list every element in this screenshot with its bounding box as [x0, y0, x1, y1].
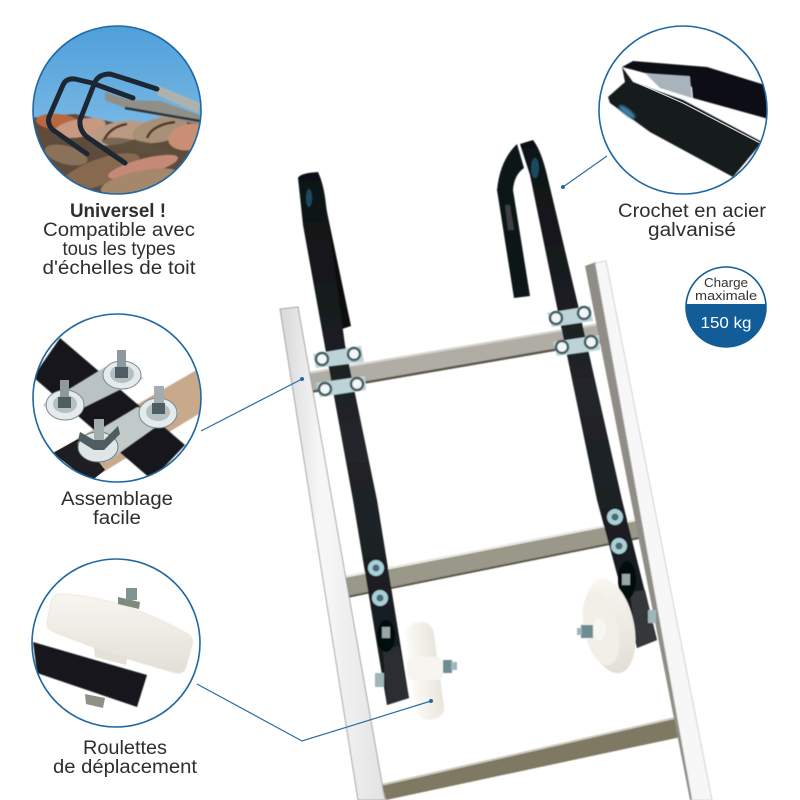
- strap washers: [368, 509, 627, 606]
- text: wheels: de déplacement: [53, 757, 198, 778]
- text: hook: [618, 201, 767, 241]
- photo rung section: [54, 438, 105, 478]
- badge: maximum load: [685, 267, 767, 350]
- text: hook: Crochet en acier: [618, 201, 767, 222]
- photo background: [595, 20, 773, 198]
- badge value: 150 kg: [700, 315, 752, 332]
- photo metal rails: [105, 85, 200, 125]
- text: assembly: facile: [93, 508, 141, 529]
- wet highlight on left hook: [306, 189, 312, 207]
- photo sky: [34, 26, 200, 124]
- callout line: hook: [561, 156, 607, 189]
- panel: universal hook on tiled roof: [32, 25, 202, 195]
- photo inner reflection: [645, 73, 692, 98]
- photo zinc plates: [43, 367, 180, 462]
- ladder rung 2: [345, 518, 644, 598]
- panel: wheel close-up: [30, 555, 205, 730]
- photo hook pipes: [48, 74, 157, 163]
- left strap: [298, 172, 409, 705]
- circle outline: [33, 26, 201, 194]
- photo back of hook: [622, 61, 772, 120]
- right strap: [520, 140, 657, 648]
- badge text top: [695, 275, 757, 303]
- right rail white face: [595, 261, 712, 800]
- right rail grey side: [585, 262, 712, 800]
- ladder rung 1: [308, 322, 606, 393]
- photo front of hook: [608, 67, 762, 177]
- left strap flange: [316, 198, 351, 329]
- wet highlight on hooks: [531, 158, 539, 178]
- text: hook: galvanisé: [648, 220, 736, 241]
- photo hub: [94, 648, 127, 665]
- text: universal: Universel !: [70, 201, 166, 222]
- photo upper bolt: [118, 588, 140, 609]
- right outer nut: [648, 610, 656, 623]
- panel: galvanised hook close-up: [595, 20, 773, 198]
- photo black strap: [33, 338, 185, 480]
- photo roof tiles: [34, 113, 200, 194]
- panel: easy assembly close-up: [30, 310, 205, 485]
- badge lower fill: [686, 304, 766, 346]
- text: wheels: Roulettes: [83, 738, 167, 759]
- ladder rung 3: [382, 716, 681, 800]
- badge text top: maximale: [695, 288, 757, 303]
- photo lower nut: [85, 694, 105, 708]
- photo bolts: [46, 350, 177, 462]
- photo metal edge: [635, 82, 760, 143]
- text: universal: d'échelles de toit: [42, 258, 196, 279]
- text: wheels: [53, 738, 198, 778]
- text: assembly: [61, 489, 173, 529]
- photo wheel: [47, 594, 193, 673]
- circle outline: [32, 559, 200, 727]
- right assembly plates: [547, 306, 600, 356]
- circle outline: [33, 314, 201, 482]
- badge text top: Charge: [704, 275, 748, 290]
- photo blue reflection: [617, 103, 637, 121]
- left wheel axle nuts: [375, 660, 457, 687]
- callout line: assembly: [201, 377, 304, 431]
- callout line: wheels: [197, 684, 433, 741]
- photo wood rung: [53, 368, 202, 480]
- lower part of left strap: [383, 646, 409, 705]
- photo background: [30, 310, 205, 485]
- circle outline: [599, 26, 767, 194]
- text: universal: Compatible avec: [43, 220, 195, 241]
- lower part of right strap: [630, 590, 657, 648]
- photo black arm: [33, 642, 147, 707]
- text: universal: tous les types: [62, 239, 176, 260]
- badge outline: [686, 267, 766, 347]
- left rail: [280, 307, 385, 800]
- photo background: [30, 555, 205, 730]
- left assembly plates: [313, 346, 366, 397]
- left wheel: [404, 621, 446, 721]
- text: assembly: Assemblage: [61, 489, 173, 510]
- strap slots: [377, 561, 636, 652]
- right wheel: [576, 574, 643, 678]
- right hook tail: [497, 144, 530, 298]
- ladder with hooks and wheels: [280, 140, 712, 800]
- text: universal: [42, 201, 196, 279]
- right hook tail highlight: [505, 205, 514, 230]
